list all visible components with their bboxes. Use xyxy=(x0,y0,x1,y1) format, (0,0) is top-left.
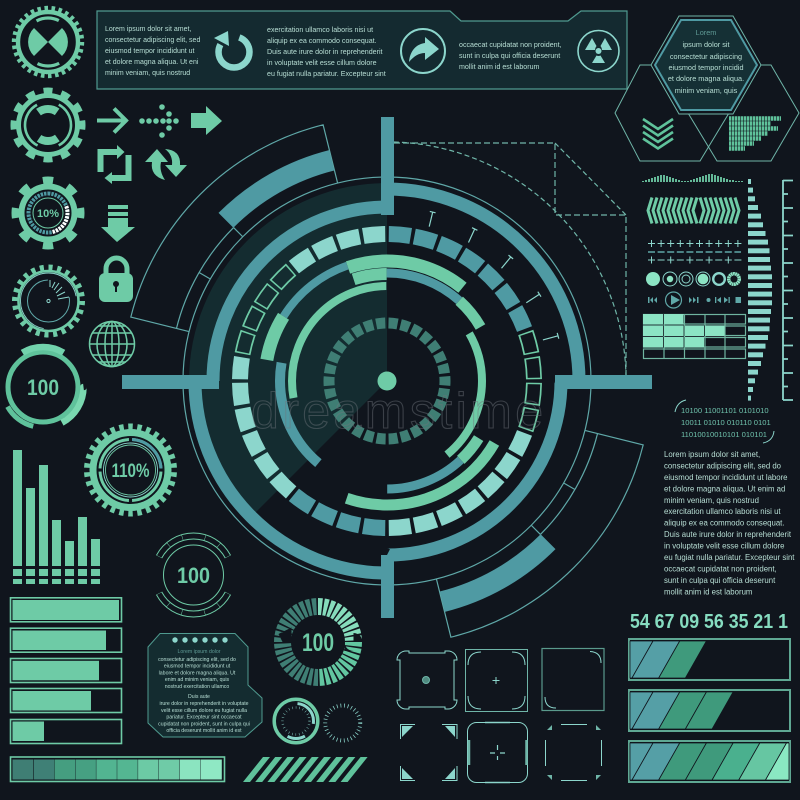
frame: crosshair xyxy=(468,722,528,782)
right paragraph: eiusmod tempor incididunt ut labore xyxy=(664,473,788,482)
hexagon text: eiusmod tempor incidid xyxy=(668,63,744,72)
progress bars stacked xyxy=(10,598,122,744)
panel text: labore et dolore magna aliqua. Ut xyxy=(159,670,236,676)
vertical ruler xyxy=(783,180,793,400)
right paragraph: occaecat cupidatat non proident, xyxy=(664,564,777,573)
panel text column 3: occaecat cupidatat non proident, xyxy=(459,41,562,49)
circle icon row xyxy=(646,272,739,286)
gear: radar xyxy=(15,268,82,334)
binary text: 10100 11001101 0101010 xyxy=(681,406,769,415)
gear: sync xyxy=(14,91,82,159)
bell bar chart xyxy=(748,179,772,401)
small dial xyxy=(274,699,318,743)
panel text column 3: mollit anim id est laborum xyxy=(459,63,540,71)
panel text: irure dolor in reprehenderit in voluptate xyxy=(159,701,249,707)
right paragraph: exercitation ullamco laboris nisi ut xyxy=(664,507,781,516)
frame: square with arcs xyxy=(542,648,604,710)
icon: globe xyxy=(90,322,134,366)
panel text: Lorem ipsum dolor xyxy=(178,649,221,655)
hexagon text: ipsum dolor sit xyxy=(682,40,730,49)
icon: recycle arrows xyxy=(145,149,187,180)
panel text column 1: consectetur adipiscing elit, sed xyxy=(105,37,200,44)
sparkline xyxy=(643,174,742,182)
panel text column 1: minim veniam, quis nostrud xyxy=(105,70,190,77)
panel text column 2: eu fugiat nulla pariatur. Excepteur sint xyxy=(267,70,386,78)
panel text column 2: aliquip ex ea commodo consequat. xyxy=(267,37,377,45)
lower left hexagon xyxy=(615,65,729,161)
slanted progress bar 3 xyxy=(629,741,790,782)
diagonal stripes xyxy=(243,757,368,782)
right paragraph: eu fugiat nulla pariatur. Excepteur sint xyxy=(664,553,795,562)
right paragraph: consectetur adipiscing elit, sed do xyxy=(664,461,782,470)
info panel xyxy=(148,634,262,737)
bar chart xyxy=(13,450,100,584)
icon: share arrow xyxy=(401,29,445,73)
panel text: nostrud exercitation ullamco xyxy=(165,684,229,690)
right paragraph: et dolore magna aliqua. Ut enim ad xyxy=(664,484,785,493)
slanted progress bar 1 xyxy=(629,639,790,680)
dots row xyxy=(172,637,228,643)
hexagon text: Lorem xyxy=(696,28,716,37)
panel text column 2: Duis aute irure dolor in reprehenderit xyxy=(267,48,383,56)
watermark: dreamstime xyxy=(251,383,543,439)
lower right hexagon xyxy=(688,65,799,161)
counter value: 100 xyxy=(177,563,210,588)
status grid xyxy=(643,314,746,358)
panel text: officia deserunt mollit anim id est xyxy=(166,728,242,734)
chevron wave xyxy=(648,198,739,224)
right paragraph: mollit anim id est laborum xyxy=(664,587,752,596)
circle counter 100 xyxy=(154,536,232,614)
icon: line arrow xyxy=(97,108,126,132)
gear value: 110% xyxy=(112,461,150,482)
panel text: Duis aute xyxy=(188,694,210,700)
center dot xyxy=(378,372,396,390)
binary text: 11010010010101 010101 xyxy=(681,430,767,439)
panel text: velit esse cillum dolore eu fugiat nulla xyxy=(161,708,247,714)
frame: corner triangles xyxy=(400,724,457,780)
icon: radiation xyxy=(578,30,619,72)
dark sector xyxy=(189,183,387,512)
ring gauge 100 xyxy=(2,346,84,428)
hexagon group xyxy=(615,16,799,161)
gradient strip xyxy=(10,757,224,782)
crosshair arms xyxy=(122,117,652,618)
panel text: eiusmod tempor incididunt ut xyxy=(164,664,231,670)
panel text column 1: et dolore magna aliqua. Ut eni xyxy=(105,59,199,66)
top text panel xyxy=(97,11,627,89)
right paragraph: aliquip ex ea commodo consequat. xyxy=(664,519,784,528)
dial rings xyxy=(183,177,591,585)
hexagon text: minim veniam, quis xyxy=(675,86,738,95)
media controls xyxy=(648,292,741,308)
main hexagon xyxy=(651,16,761,114)
panel text: consectetur adipiscing elit, sed do xyxy=(158,657,236,663)
lower right wedge xyxy=(160,154,643,637)
right paragraph: Duis aute irure dolor in reprehenderit xyxy=(664,530,792,539)
tick dial xyxy=(325,706,360,740)
gear value: 10% xyxy=(37,208,59,220)
icon: chevrons xyxy=(643,119,673,148)
plus and minus rows xyxy=(648,240,741,264)
gauge value: 100 xyxy=(302,629,334,657)
frame: dashed corners xyxy=(546,724,602,780)
frame: lobed corners xyxy=(397,651,457,709)
right paragraph: minim veniam, quis nostrud xyxy=(664,496,759,505)
icon: undo arrow xyxy=(214,31,250,68)
panel text column 1: Lorem ipsum dolor sit amet, xyxy=(105,26,191,33)
panel text: cupidatat non proident, sunt in culpa qui xyxy=(158,722,250,728)
panel text column 3: sunt in culpa qui officia deserunt xyxy=(459,52,560,60)
right paragraph: in voluptate velit esse cillum dolore xyxy=(664,542,784,550)
icon: padlock xyxy=(99,258,133,302)
icon: dotted arrow xyxy=(139,104,179,138)
gear: 10 percent xyxy=(16,181,80,245)
gauge value: 100 xyxy=(27,375,59,400)
icon: stepped grid xyxy=(729,118,781,148)
panel text: enim ad minim veniam, quis xyxy=(165,677,230,683)
hexagon text: consectetur adipiscing xyxy=(670,52,742,61)
panel text column 2: exercitation ullamco laboris nisi ut xyxy=(267,26,373,34)
radial gauge 100 xyxy=(282,606,354,678)
binary text: 10011 01010 010110 0101 xyxy=(681,418,771,427)
targeting frames xyxy=(397,648,604,782)
upper left wedge xyxy=(131,125,615,609)
dashed guide lines xyxy=(394,142,626,375)
gear: 110 percent xyxy=(87,426,174,514)
panel text: pariatur. Excepteur sint occaecat xyxy=(166,714,242,720)
gear: crossed circle xyxy=(14,8,82,76)
hexagon text: et dolore magna aliqua. xyxy=(668,74,744,83)
right paragraph: sunt in culpa qui officia deserunt xyxy=(664,576,776,585)
slanted progress bar 2 xyxy=(629,690,790,731)
tick marks xyxy=(429,211,559,340)
right paragraph: Lorem ipsum dolor sit amet, xyxy=(664,450,760,459)
panel text column 1: eiusmod tempor incididunt ut xyxy=(105,48,195,55)
binary text xyxy=(675,400,774,443)
central radar dial xyxy=(122,117,652,637)
icon: block arrow xyxy=(191,106,222,135)
icon: download arrow xyxy=(101,205,135,242)
frame: rounded square xyxy=(466,650,528,712)
arrow icons xyxy=(90,104,222,366)
icon: repeat xyxy=(100,145,128,184)
panel text column 2: in voluptate velit esse cillum dolore xyxy=(267,59,377,67)
